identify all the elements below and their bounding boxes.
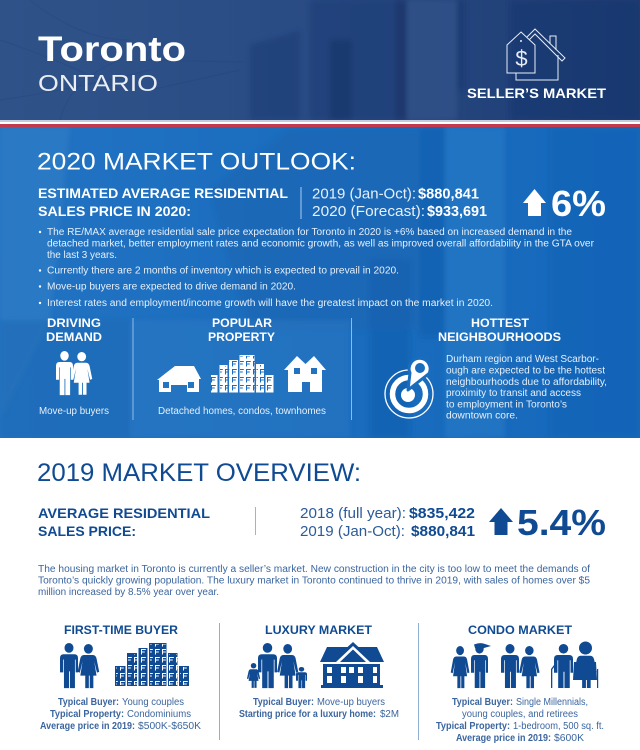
- text: 2019 price figures: 2018 (full year):: [300, 505, 406, 522]
- panel: first-time buyer: $500K-$650K: [138, 721, 201, 732]
- text: 2019 price figures: $880,841: [411, 523, 475, 540]
- panel: luxury market: $2M: [380, 709, 399, 720]
- text: 2019 price figures: 2019 (Jan-Oct):: [300, 523, 405, 540]
- stat: 5.4 percent: 5.4%: [517, 502, 606, 543]
- icon: luxury house: [320, 642, 384, 688]
- panel: hottest neighbourhoods: [385, 316, 607, 422]
- panel: first-time buyer: Average price in 2019:: [40, 721, 135, 732]
- icon: condominium towers: [115, 643, 189, 686]
- panel: first-time buyer: Typical Property:: [50, 709, 124, 720]
- icon: condo towers: [211, 355, 274, 392]
- panel: condo market: Average price in 2019:: [456, 733, 551, 744]
- panel: popular property: POPULAR: [212, 316, 272, 330]
- header band: [0, 0, 640, 120]
- title: Toronto: [38, 30, 186, 69]
- panel: first-time buyer: Young couples: [122, 697, 184, 708]
- text: outlook bullets: Interest rates and employment/income growth will have the greatest impact on the market in 2020.: [47, 298, 493, 309]
- panel: driving demand: DRIVING: [47, 316, 101, 330]
- panel: condo market: [436, 623, 604, 744]
- title: ONTARIO: [38, 70, 158, 96]
- text: estimated average price label: SALES PRICE IN 2020:: [38, 203, 191, 219]
- panel: luxury market: Move-up buyers: [317, 697, 385, 708]
- text: 2020 price figures: 2019 (Jan-Oct):: [312, 186, 416, 202]
- panel: hottest neighbourhoods: Durham region and West Scarbor-: [446, 354, 599, 365]
- text: outlook bullets: the last 3 years.: [47, 250, 117, 261]
- icon: family: [247, 643, 307, 688]
- panel: first-time buyer: Typical Buyer:: [58, 697, 119, 708]
- panel: popular property: Detached homes, condos, townhomes: [158, 406, 326, 417]
- panel: hottest neighbourhoods: ough are expected to be the hottest: [446, 366, 605, 376]
- text: outlook bullets: [39, 227, 595, 309]
- icon: house with price tag: [507, 29, 565, 80]
- text: outlook bullets: Move-up buyers are expected to drive demand in 2020.: [47, 282, 296, 292]
- panel: popular property: [157, 316, 326, 417]
- heading: 2020 market outlook: 2020 MARKET OUTLOOK:: [37, 148, 356, 176]
- text: 2020 price figures: [312, 186, 487, 220]
- text: overview paragraph: million increased by 8.5% year over year.: [38, 587, 219, 598]
- panel: condo market: $600K: [554, 733, 584, 744]
- panel: condo market: Typical Buyer:: [452, 697, 513, 708]
- text: overview paragraph: [38, 564, 590, 598]
- text: outlook bullets: The RE/MAX average residential sale price expectation for Toronto in 2020 is +6% based on increased demand in the: [47, 227, 572, 238]
- stripe: white and red divider: [0, 120, 640, 127]
- text: 2020 price figures: $933,691: [427, 203, 487, 220]
- text: outlook bullets: Currently there are 2 months of inventory which is expected to prevail in 2020.: [47, 266, 399, 276]
- panel: hottest neighbourhoods: neighbourhoods due to affordability,: [446, 377, 607, 388]
- icon: map pin on target: [385, 358, 433, 418]
- stat: 6 percent: 6%: [551, 183, 606, 224]
- panel: condo market: Typical Property:: [436, 721, 510, 732]
- icon: millennial, couple and retiree figures: [451, 642, 598, 688]
- title: [38, 30, 186, 96]
- panel: driving demand: DEMAND: [46, 330, 102, 344]
- panel: first-time buyer: FIRST-TIME BUYER: [64, 623, 178, 637]
- text: 2019 price figures: $835,422: [409, 505, 475, 522]
- panel: hottest neighbourhoods: to employment in Toronto’s: [446, 400, 567, 410]
- panel: popular property: PROPERTY: [208, 330, 275, 344]
- text: overview paragraph: Toronto’s quickly growing population. The luxury market in Toronto continued to thrive in 2019, with sales of homes over $5: [38, 576, 590, 586]
- text: average price label: AVERAGE RESIDENTIAL: [38, 505, 210, 521]
- panel: condo market: CONDO MARKET: [468, 623, 573, 637]
- panel: driving demand: Move-up buyers: [39, 406, 109, 417]
- panel: luxury market: [239, 623, 399, 720]
- panel: first-time buyer: Condominiums: [127, 709, 191, 720]
- panel: luxury market: LUXURY MARKET: [265, 623, 373, 637]
- text: average price label: [38, 505, 210, 539]
- text: 2019 price figures: [300, 505, 475, 540]
- text: estimated average price label: ESTIMATED AVERAGE RESIDENTIAL: [38, 185, 288, 201]
- text: overview paragraph: The housing market in Toronto is currently a seller’s market. New construction in the city is too low to meet the demands of: [38, 564, 590, 575]
- panel: driving demand: [39, 316, 109, 417]
- panel: hottest neighbourhoods: downtown core.: [446, 410, 518, 422]
- panel: luxury market: Starting price for a luxury home:: [239, 709, 376, 720]
- outlook panel background: [0, 127, 640, 438]
- icon: couple: [56, 351, 92, 395]
- panel: hottest neighbourhoods: HOTTEST: [471, 316, 530, 330]
- panel: first-time buyer: [40, 623, 201, 732]
- panel: condo market: young couples, and retirees: [462, 709, 578, 720]
- panel: luxury market: Typical Buyer:: [253, 697, 314, 708]
- icon: up arrow white: [523, 189, 546, 216]
- icon: house with price tag: $: [515, 46, 528, 71]
- panel: hottest neighbourhoods: NEIGHBOURHOODS: [438, 330, 561, 344]
- heading: 2019 market overview: 2019 MARKET OVERVIEW:: [37, 459, 361, 487]
- text: outlook bullets: detached market, better employment rates and economic growth, as well as improved overall affordability in the GTA over: [47, 238, 595, 250]
- icon: up arrow navy: [489, 508, 513, 535]
- text: estimated average price label: [38, 185, 288, 219]
- panel: condo market: Single Millennials,: [516, 697, 588, 708]
- panel: condo market: 1-bedroom, 500 sq. ft.: [513, 721, 604, 732]
- text: 2020 price figures: 2020 (Forecast):: [312, 203, 425, 220]
- text: average price label: SALES PRICE:: [38, 523, 136, 539]
- text: 2020 price figures: $880,841: [418, 186, 479, 202]
- icon: townhouses: [284, 356, 326, 392]
- panel: hottest neighbourhoods: proximity to transit and access: [446, 388, 581, 399]
- label: seller's market: SELLER’S MARKET: [467, 85, 606, 101]
- icon: young couple: [60, 643, 99, 688]
- icon: detached house: [157, 366, 201, 392]
